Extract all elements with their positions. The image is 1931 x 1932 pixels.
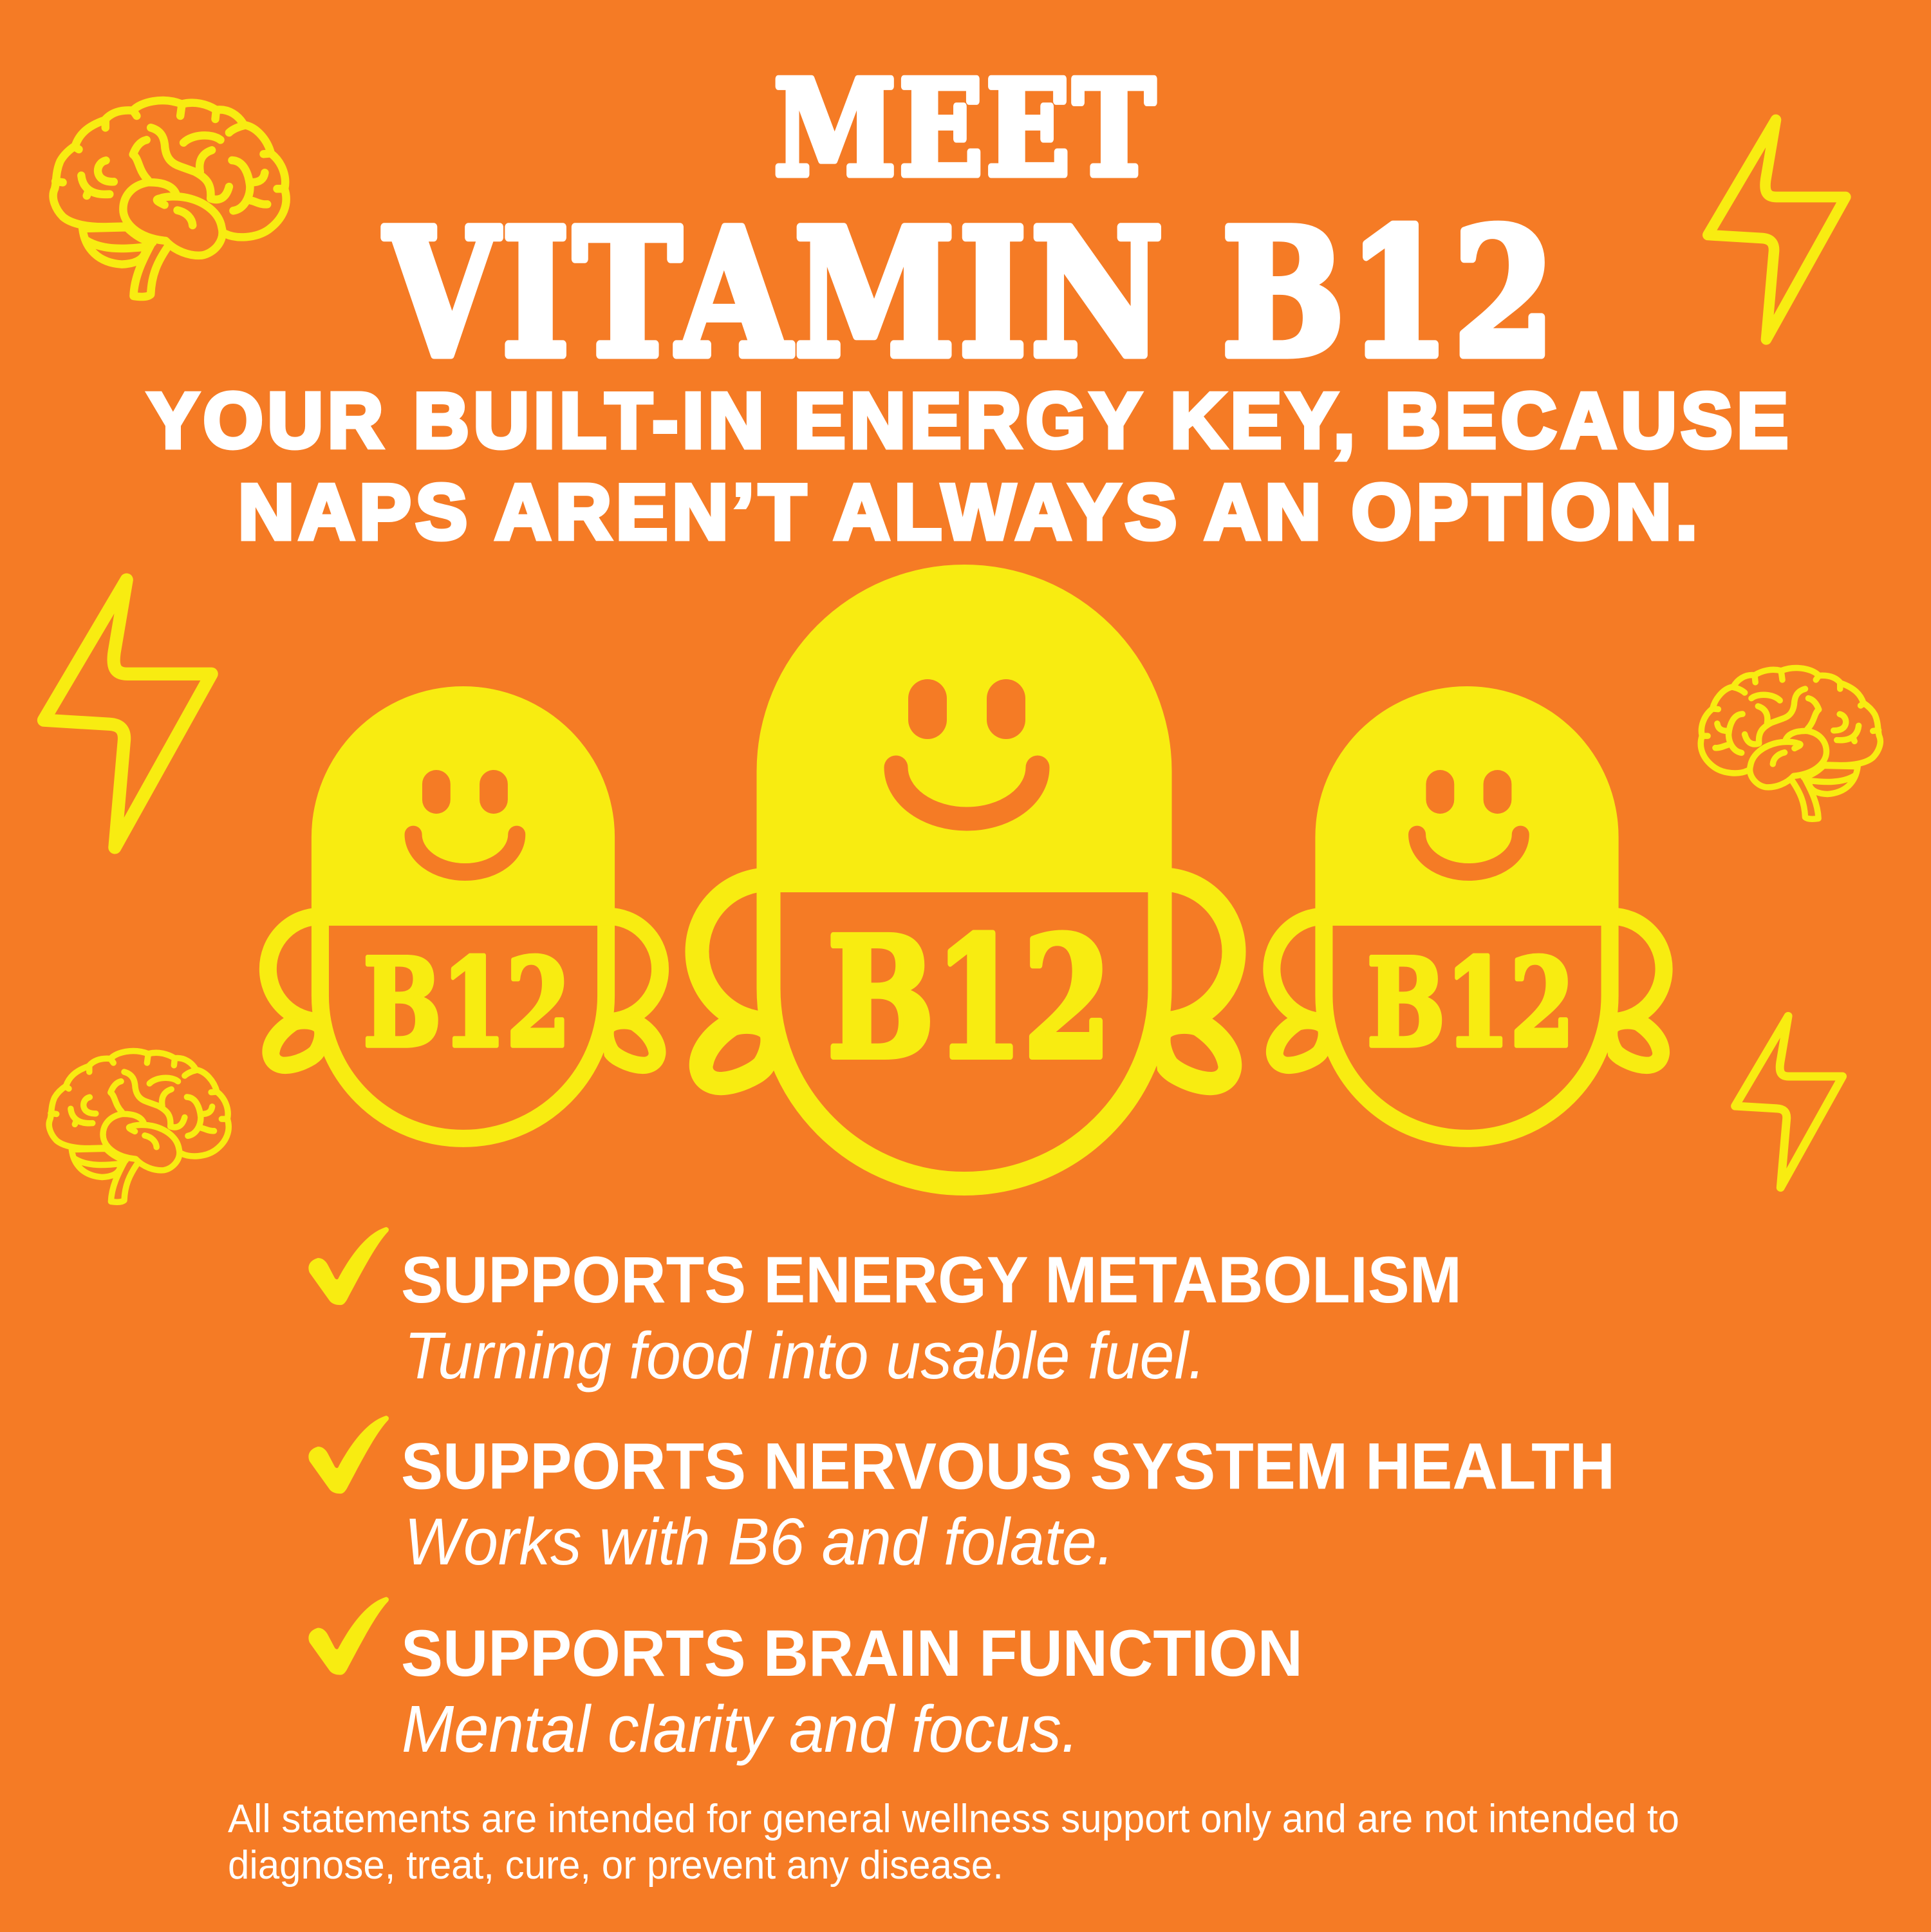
subtitle line one: YOUR BUILT-IN ENERGY KEY, BECAUSE [147,377,1793,464]
icon: brain right, mirrored [1701,668,1880,819]
character: center B12 capsule [689,565,1242,1183]
character: right B12 capsule [1266,686,1670,1138]
disclaimer: diagnose, treat, cure, or prevent any disease. [228,1843,1003,1888]
benefit heading two: SUPPORTS NERVOUS SYSTEM HEALTH [401,1429,1615,1503]
icon: lightning bolt left [44,580,212,847]
icon: check mark two [308,1416,389,1494]
subtitle line two: NAPS AREN’T ALWAYS AN OPTION. [238,468,1702,556]
benefit heading one: SUPPORTS ENERGY METABOLISM [401,1243,1462,1317]
benefit description two: Works with B6 and folate. [404,1505,1114,1579]
disclaimer: All statements are intended for general wellness support only and are not intended to [228,1797,1679,1841]
icon: brain top left [53,100,286,297]
benefit description one: Turning food into usable fuel. [404,1318,1206,1393]
benefit heading three: SUPPORTS BRAIN FUNCTION [401,1617,1303,1690]
icon: check mark three [308,1597,389,1675]
character: center B12 capsule: B12 [827,901,1112,1096]
icon: check mark one [308,1227,389,1305]
icon: lightning bolt top right [1708,120,1845,339]
icon: lightning bolt lower right [1735,1016,1843,1188]
character: left B12 capsule: B12 [363,932,571,1074]
character: right B12 capsule: B12 [1367,932,1574,1074]
title: vitamin b12: VITAMIN B12 [382,191,1558,397]
disclaimer [228,1797,1679,1888]
benefit description three: Mental clarity and focus. [402,1692,1079,1766]
character: left B12 capsule [262,686,666,1138]
title: meet: MEET [774,52,1158,206]
icon: brain lower left [49,1051,229,1202]
